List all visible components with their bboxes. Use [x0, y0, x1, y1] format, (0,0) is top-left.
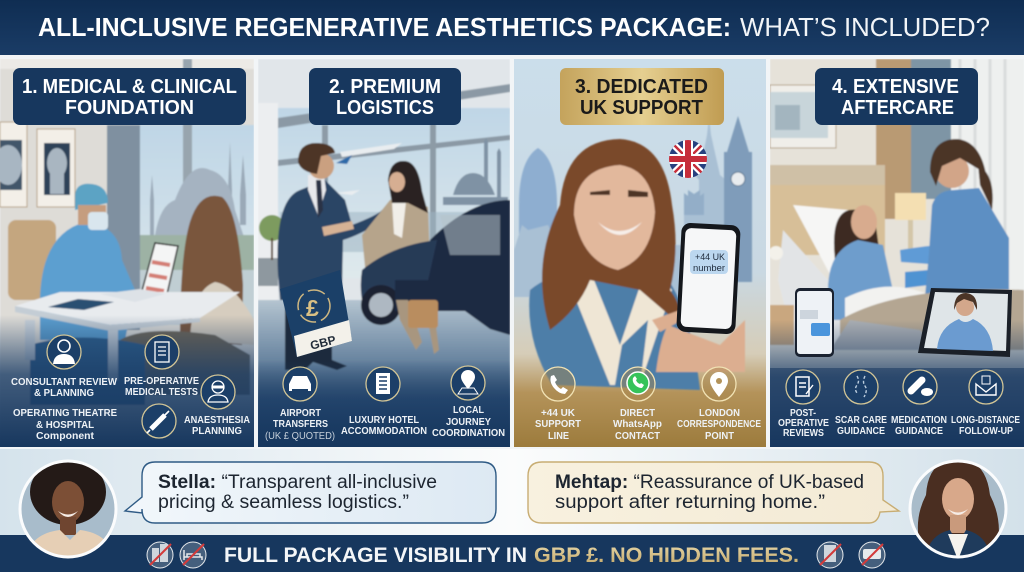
- label: medication guidance: GUIDANCE: [895, 425, 943, 437]
- heading: panel 3: [560, 68, 724, 125]
- icon: medication: [903, 370, 937, 404]
- heading: panel 1: [13, 68, 246, 125]
- icon: WhatsApp: [621, 367, 655, 401]
- heading: panel 1: 1. MEDICAL & CLINICAL: [22, 76, 237, 98]
- heading: panel 4: AFTERCARE: [841, 97, 954, 119]
- icon: hotel: [366, 367, 400, 401]
- heading: panel 4: [815, 68, 978, 125]
- panel: 4. extensive aftercare: [769, 59, 1024, 447]
- footer bar: FULL PACKAGE VISIBILITY IN: [224, 544, 527, 567]
- icon: scar care: [844, 370, 878, 404]
- callout: Stella quote: Stella: “Transparent all-inclusive: [158, 472, 437, 493]
- label: London correspondence point: CORRESPONDENCE: [677, 418, 761, 430]
- icon: map pin: [451, 366, 485, 400]
- icon: post-operative review: [786, 370, 820, 404]
- heading: panel 3: 3. DEDICATED: [575, 76, 708, 98]
- icon: phone line: [541, 367, 575, 401]
- label: long-distance follow-up: [951, 414, 1020, 437]
- label: direct WhatsApp contact: CONTACT: [615, 430, 661, 442]
- icon: tablet video call: [918, 288, 1012, 357]
- label: post-operative reviews: [778, 407, 829, 439]
- label: long-distance follow-up: FOLLOW-UP: [959, 425, 1013, 437]
- footer bar: [0, 535, 1024, 572]
- label: direct WhatsApp contact: DIRECT: [620, 407, 656, 419]
- testimonial band background: [0, 449, 1024, 536]
- heading: panel 4: 4. EXTENSIVE: [832, 76, 959, 98]
- label: luxury hotel accommodation: ACCOMMODATION: [341, 425, 427, 437]
- icon: GBP card: £: [306, 295, 319, 321]
- illustration: UK advisor with phone: [514, 116, 752, 390]
- label: airport transfers: TRANSFERS: [273, 418, 328, 430]
- callout: Stella quote: [125, 462, 496, 523]
- label: scar care guidance: SCAR CARE: [835, 414, 887, 426]
- label: local journey coordination: COORDINATION: [432, 427, 505, 439]
- icon: GBP card: GBP: [309, 333, 337, 353]
- label: +44 UK support line: +44 UK: [541, 407, 575, 419]
- label: London correspondence point: POINT: [705, 430, 735, 442]
- label: +44 UK support line: [535, 409, 581, 439]
- label: post-operative reviews: POST-: [790, 407, 816, 419]
- label: medication guidance: [891, 414, 947, 437]
- label: London correspondence point: LONDON: [699, 407, 740, 419]
- label: direct WhatsApp contact: WhatsApp: [613, 418, 662, 430]
- icon: GBP card: [280, 270, 352, 357]
- icon: no hidden clinic fees: [817, 542, 843, 568]
- avatar: Mehtap: [910, 458, 1006, 560]
- label: +44 UK support line: SUPPORT: [535, 418, 582, 430]
- heading: panel 2: [309, 68, 461, 125]
- avatar: Stella: [20, 459, 116, 562]
- label: scar care guidance: GUIDANCE: [837, 425, 885, 437]
- icon: phone showing +44 UK number: number: [693, 263, 725, 273]
- heading: panel 1: FOUNDATION: [65, 97, 194, 119]
- label: local journey coordination: JOURNEY: [446, 416, 491, 428]
- label: local journey coordination: [432, 406, 504, 436]
- icon: phone with chat: [795, 288, 834, 357]
- footer bar: GBP £. NO HIDDEN FEES.: [534, 544, 799, 567]
- icon: UK flag bubble: [669, 140, 707, 178]
- title banner: [0, 0, 1024, 55]
- callout: Mehtap quote: support after returning home.”: [555, 492, 825, 513]
- label: luxury hotel accommodation: LUXURY HOTEL: [349, 414, 420, 426]
- label: airport transfers: AIRPORT: [280, 407, 322, 419]
- illustration: consultation room: [0, 59, 254, 405]
- label: direct WhatsApp contact: [613, 409, 662, 439]
- label: airport transfers: (UK £ QUOTED): [265, 430, 335, 442]
- illustration: airport handover and car: [258, 59, 510, 447]
- label: local journey coordination: LOCAL: [453, 404, 484, 416]
- label: pre-operative medical tests: [124, 377, 199, 395]
- icon: phone showing +44 UK number: [676, 223, 741, 334]
- label: +44 UK support line: LINE: [548, 430, 569, 442]
- icon: car: [283, 367, 317, 401]
- label: London correspondence point: [677, 409, 761, 439]
- panel: 1. medical and clinical foundation: [0, 59, 254, 447]
- label: operating theatre and hospital component: [13, 407, 117, 442]
- heading: panel 2: LOGISTICS: [336, 97, 434, 119]
- callout: Stella quote: pricing & seamless logistics.”: [158, 492, 409, 513]
- icon: syringe: [142, 404, 176, 438]
- icon: consultant: [47, 335, 81, 369]
- label: pre-operative medical tests: PRE-OPERATIVE: [124, 375, 199, 387]
- label: operating theatre and hospital component: & HOSPITAL: [36, 419, 95, 431]
- heading: panel 3: UK SUPPORT: [580, 97, 703, 119]
- icon: no hidden transfer fees: [859, 542, 885, 568]
- label: anaesthesia planning: PLANNING: [192, 425, 242, 437]
- illustration: recovery room: [770, 59, 1024, 368]
- label: anaesthesia planning: ANAESTHESIA: [184, 414, 250, 426]
- label: anaesthesia planning: [184, 416, 250, 434]
- label: medication guidance: MEDICATION: [891, 414, 947, 426]
- label: pre-operative medical tests: MEDICAL TESTS: [125, 386, 198, 398]
- callout: Mehtap quote: [528, 462, 899, 523]
- heading: panel 2: 2. PREMIUM: [329, 76, 441, 98]
- panel: 2. premium logistics: [258, 59, 510, 447]
- icon: phone showing +44 UK number: +44 UK: [695, 252, 725, 262]
- icon: long-distance envelope: [969, 370, 1003, 404]
- title banner: WHAT’S INCLUDED?: [740, 12, 990, 42]
- icon: no hidden hospital fees: [147, 542, 173, 568]
- label: post-operative reviews: OPERATIVE: [778, 417, 829, 429]
- icon: London pin: [702, 367, 736, 401]
- title banner: ALL-INCLUSIVE REGENERATIVE AESTHETICS PACKAGE:: [38, 12, 731, 42]
- icon: no hidden hotel fees: [180, 542, 206, 568]
- icon: clipboard: [145, 335, 179, 369]
- label: post-operative reviews: REVIEWS: [783, 427, 824, 439]
- panel: 3. dedicated UK support: [514, 59, 766, 447]
- label: consultant review and planning: [11, 378, 117, 396]
- label: operating theatre and hospital component: OPERATING THEATRE: [13, 407, 117, 419]
- label: consultant review and planning: & PLANNING: [34, 387, 94, 399]
- icon: anaesthesia mask: [201, 375, 235, 409]
- label: scar care guidance: [835, 414, 887, 437]
- label: consultant review and planning: CONSULTANT REVIEW: [11, 376, 117, 388]
- callout: Mehtap quote: Mehtap: “Reassurance of UK-based: [555, 472, 864, 493]
- label: operating theatre and hospital component: Component: [36, 430, 94, 442]
- label: airport transfers: [265, 407, 335, 442]
- label: luxury hotel accommodation: [341, 416, 426, 434]
